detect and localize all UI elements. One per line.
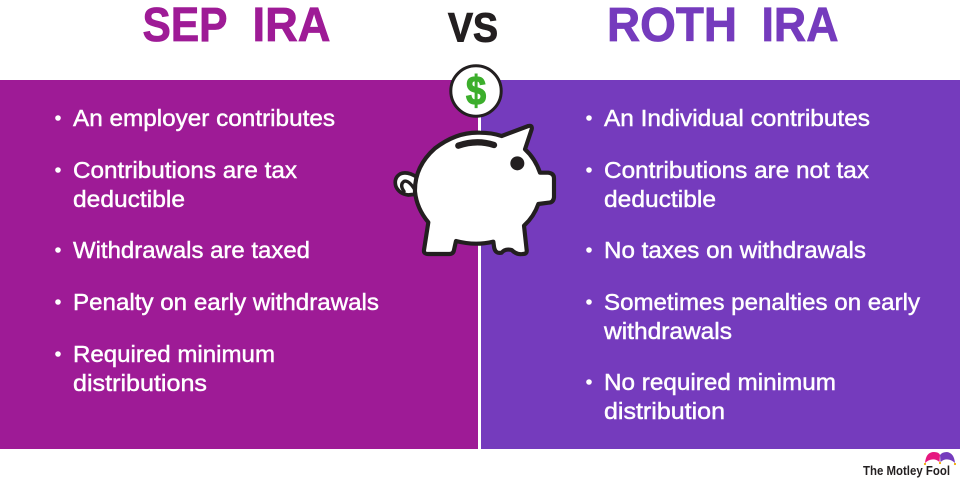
icon: dollar coin: $: [466, 68, 486, 114]
bullet list: SEP IRA features: [55, 105, 379, 396]
title: SEP IRA: IRA: [252, 0, 330, 52]
bullet list: SEP IRA features: Penalty on early withdrawals: [73, 289, 379, 315]
bullet list: Roth IRA features: deductible: [604, 186, 716, 212]
logo: The Motley Fool: [863, 452, 956, 478]
panel: Roth IRA: [481, 80, 960, 449]
bullet list: SEP IRA features: An employer contributes: [73, 105, 335, 131]
icon: dollar coin: [451, 66, 501, 116]
panel: SEP IRA: [0, 80, 478, 449]
bullet list: Roth IRA features: [586, 105, 920, 424]
title: vs: VS: [448, 4, 498, 50]
title: SEP IRA: [142, 0, 330, 52]
bullet list: Roth IRA features: distribution: [604, 398, 725, 424]
bullet list: SEP IRA features: deductible: [73, 186, 185, 212]
icon: jester hat: [924, 452, 956, 465]
bullet list: Roth IRA features: withdrawals: [603, 318, 732, 344]
title: ROTH IRA: IRA: [762, 0, 838, 52]
title: ROTH IRA: [607, 0, 838, 52]
bullet list: Roth IRA features: No taxes on withdrawals: [604, 237, 866, 263]
icon: piggy bank: [395, 126, 554, 254]
bullet list: SEP IRA features: Contributions are tax: [73, 157, 297, 183]
bullet list: SEP IRA features: distributions: [73, 370, 207, 396]
bullet list: SEP IRA features: Required minimum: [73, 341, 275, 367]
bullet list: Roth IRA features: Sometimes penalties on early: [604, 289, 920, 315]
bullet list: Roth IRA features: An Individual contributes: [604, 105, 870, 131]
bullet list: SEP IRA features: Withdrawals are taxed: [73, 237, 310, 263]
logo wordmark: The Motley Fool: [863, 464, 950, 478]
bullet list: Roth IRA features: Contributions are not tax: [604, 157, 869, 183]
bullet list: Roth IRA features: No required minimum: [604, 369, 836, 395]
title: ROTH IRA: ROTH: [607, 0, 737, 52]
title: SEP IRA: SEP: [142, 0, 228, 52]
